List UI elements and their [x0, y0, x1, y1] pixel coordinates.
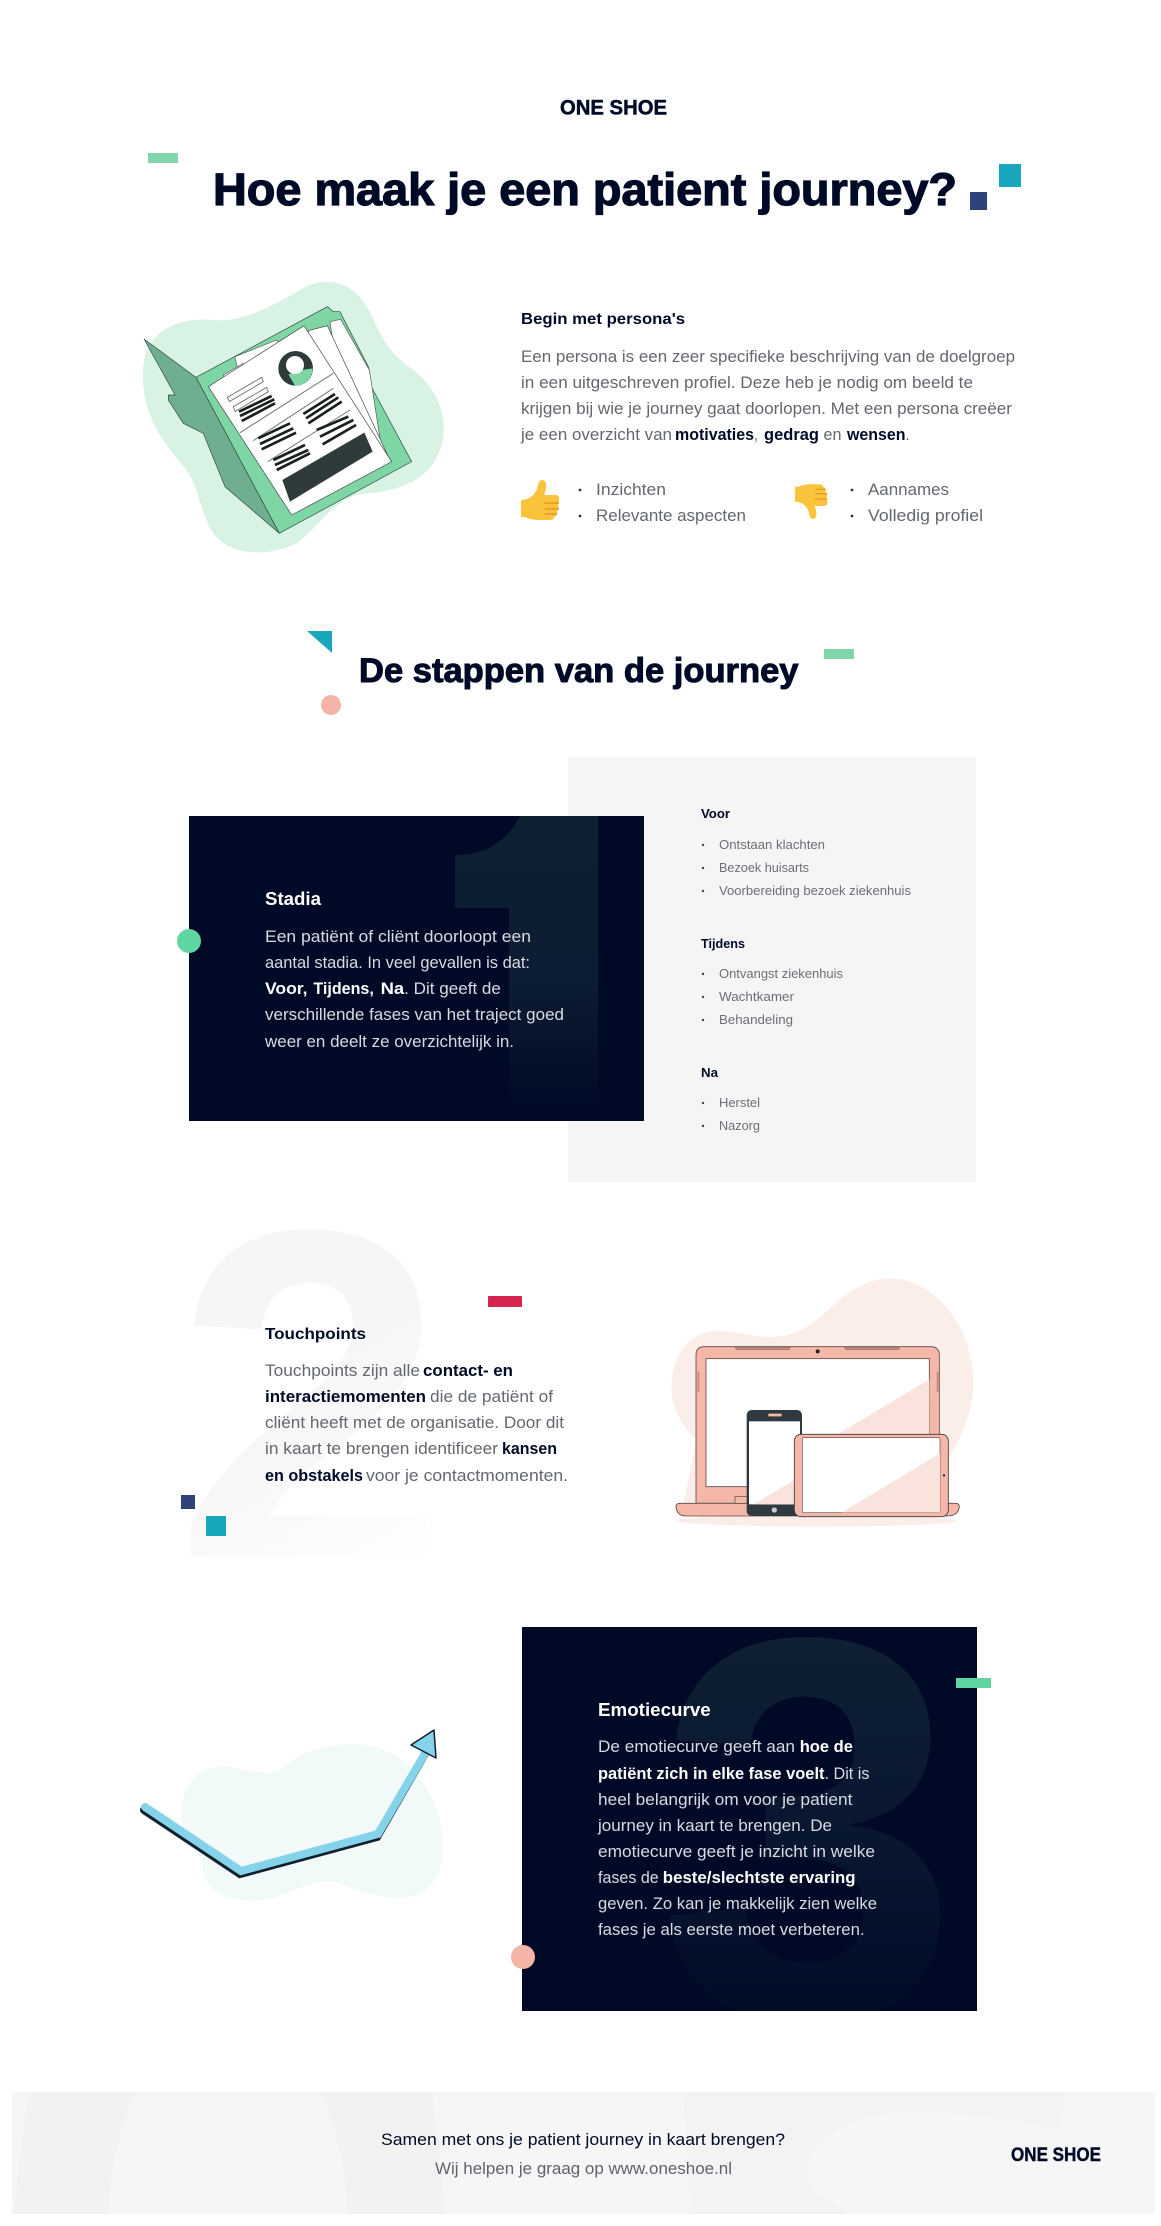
- panel: stadia list background: [568, 757, 976, 1182]
- list group: na: Nazorg: [719, 1118, 760, 1133]
- list: pros: [579, 480, 746, 525]
- text block: touchpoints description: cliënt heeft met de organisatie. Door dit: [265, 1413, 564, 1432]
- list group: tijdens: Behandeling: [719, 1012, 793, 1027]
- decoration: red bar: [488, 1296, 522, 1307]
- text block: stadia description: . Dit geeft de: [404, 979, 501, 998]
- text block: stadia description: Voor,: [265, 979, 308, 998]
- text block: stadia description: Na: [381, 979, 405, 998]
- heading: begin met persona's: Begin met persona's: [521, 311, 685, 328]
- text block: persona description: .: [906, 425, 910, 444]
- text block: persona description: in een uitgeschreven profiel. Deze heb je nodig om beeld te: [521, 373, 973, 392]
- list: pros: Relevante aspecten: [596, 506, 746, 525]
- list: pros: Inzichten: [596, 480, 666, 499]
- large number 1: 1: [449, 799, 671, 1246]
- text block: touchpoints description: die de patiënt of: [430, 1387, 553, 1406]
- decoration: navy square: [970, 192, 987, 210]
- text block: stadia description: Tijdens,: [313, 979, 374, 998]
- text block: touchpoints description: voor je contactmomenten.: [366, 1466, 568, 1485]
- text block: touchpoints description: Touchpoints zijn alle: [265, 1361, 420, 1380]
- list group: tijdens: Ontvangst ziekenhuis: [719, 966, 843, 981]
- heading: touchpoints: Touchpoints: [265, 1326, 366, 1343]
- heading: stadia: Stadia: [265, 889, 322, 909]
- text block: emotiecurve description: emotiecurve geeft je inzicht in welke: [598, 1842, 875, 1861]
- list: stadia phases: [701, 806, 911, 1133]
- heading: de stappen van de journey: De stappen van de journey: [359, 652, 799, 690]
- text block: touchpoints description: interactiemomenten: [265, 1387, 426, 1406]
- logo: One Shoe footer: ONE SHOE: [1011, 2145, 1101, 2166]
- text block: footer contact: Wij helpen je graag op www.oneshoe.nl: [435, 2159, 732, 2178]
- text block: emotiecurve description: [597, 1737, 877, 1939]
- panel: begin met persona's: [520, 311, 1015, 525]
- logo: One Shoe: ONE SHOE: [560, 96, 667, 120]
- decoration: pink circle: [511, 1945, 535, 1969]
- decoration: green bar: [956, 1678, 991, 1688]
- list group: na: Na: [701, 1065, 719, 1080]
- text block: emotiecurve description: . Dit is: [824, 1764, 870, 1783]
- list group: tijdens: Tijdens: [701, 936, 745, 951]
- text block: persona description: gedrag: [764, 425, 819, 444]
- text block: emotiecurve description: fases je als eerste moet verbeteren.: [598, 1920, 865, 1939]
- text block: emotiecurve description: heel belangrijk om voor je patient: [598, 1790, 853, 1809]
- decoration: pink circle: [321, 695, 341, 715]
- text block: touchpoints description: [265, 1361, 568, 1485]
- list group: voor: [701, 806, 911, 898]
- decoration: green bar top left: [148, 153, 178, 163]
- decoration: navy square: [181, 1495, 195, 1509]
- text block: touchpoints description: kansen: [502, 1439, 557, 1458]
- callout: footer question: Samen met ons je patient journey in kaart brengen?: [381, 2130, 785, 2149]
- text block: emotiecurve description: geven. Zo kan je makkelijk zien welke: [598, 1894, 877, 1913]
- title: Hoe maak je een patient journey?: [213, 164, 957, 215]
- list group: tijdens: [701, 936, 843, 1027]
- illustration: emotion curve: [144, 1730, 443, 1900]
- decoration: teal square: [206, 1516, 226, 1536]
- text block: emotiecurve description: journey in kaart te brengen. De: [597, 1816, 832, 1835]
- text block: persona description: Een persona is een zeer specifieke beschrijving van de doelgroep: [521, 347, 1015, 366]
- decoration: green circle: [177, 929, 201, 953]
- text block: persona description: [520, 347, 1015, 444]
- list: cons: [851, 480, 983, 525]
- list group: na: Herstel: [719, 1095, 760, 1110]
- large number 2: 2: [174, 1128, 446, 1675]
- panel: emotiecurve card: [522, 1627, 977, 2011]
- text block: persona description: krijgen bij wie je journey gaat doorlopen. Met een persona creëer: [521, 399, 1012, 418]
- heading: emotiecurve: Emotiecurve: [598, 1700, 711, 1720]
- icon: thumbs up: [521, 480, 559, 520]
- decoration: teal square: [999, 164, 1021, 187]
- text block: stadia description: weer en deelt ze overzichtelijk in.: [264, 1032, 514, 1051]
- text block: touchpoints description: contact- en: [423, 1361, 513, 1380]
- text block: persona description: je een overzicht van: [520, 425, 672, 444]
- text block: stadia description: [264, 927, 564, 1051]
- text block: stadia description: verschillende fases van het traject goed: [265, 1005, 564, 1024]
- text block: touchpoints description: in kaart te brengen identificeer: [265, 1439, 498, 1458]
- text block: emotiecurve description: hoe de: [800, 1737, 853, 1756]
- text block: persona description: motivaties: [675, 425, 754, 444]
- footer background shapes: [15, 2092, 1066, 2214]
- text block: persona description: en: [824, 425, 842, 444]
- large number 1: [455, 816, 598, 1052]
- list group: voor: Voor: [701, 806, 730, 821]
- list group: na: [701, 1065, 760, 1133]
- text block: touchpoints description: en obstakels: [265, 1466, 363, 1485]
- text block: stadia description: Een patiënt of cliënt doorloopt een: [265, 927, 531, 946]
- illustration: devices: [672, 1278, 973, 1527]
- list: cons: Volledig profiel: [868, 506, 983, 525]
- panel: touchpoints: [265, 1326, 568, 1485]
- list group: voor: Bezoek huisarts: [719, 860, 809, 875]
- list group: voor: Voorbereiding bezoek ziekenhuis: [719, 883, 911, 898]
- text block: persona description: wensen: [846, 425, 906, 444]
- decoration: green bar right of heading: [824, 649, 854, 659]
- text block: emotiecurve description: patiënt zich in elke fase voelt: [598, 1764, 825, 1783]
- text block: emotiecurve description: De emotiecurve geeft aan: [598, 1737, 795, 1756]
- large number 3: 3: [657, 1526, 960, 2133]
- text block: stadia description: aantal stadia. In veel gevallen is dat:: [265, 953, 530, 972]
- panel: footer: [12, 2092, 1155, 2214]
- list: cons: Aannames: [868, 480, 949, 499]
- list group: tijdens: Wachtkamer: [719, 989, 795, 1004]
- text block: emotiecurve description: beste/slechtste ervaring: [663, 1868, 856, 1887]
- list group: voor: Ontstaan klachten: [719, 837, 825, 852]
- text block: emotiecurve description: fases de: [598, 1868, 659, 1887]
- decoration: teal triangle: [307, 631, 332, 653]
- illustration: persona folder: [143, 282, 444, 552]
- panel: stadia card: [189, 816, 644, 1121]
- text block: persona description: ,: [754, 425, 758, 444]
- icon: thumbs down: [795, 484, 827, 519]
